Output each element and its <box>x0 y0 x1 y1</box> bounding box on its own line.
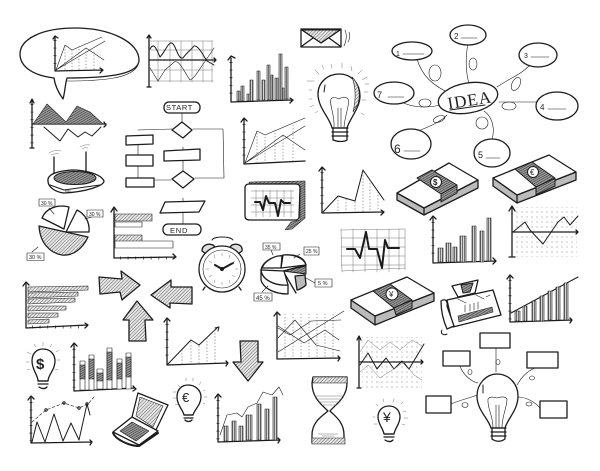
dollar bulb: $ <box>36 356 45 373</box>
node 1 <box>392 42 432 60</box>
yuan bulb <box>373 399 408 442</box>
arrow down <box>233 341 263 381</box>
flowchart start: START <box>166 103 193 112</box>
node 4 <box>536 92 578 120</box>
node 4: 4 <box>540 103 545 112</box>
dollar money stack: $ <box>433 178 438 187</box>
euro money stack <box>493 155 576 203</box>
wave line chart on grid <box>147 35 216 87</box>
pie label top: 30 % <box>41 201 53 207</box>
bar line chart bottom <box>215 387 283 443</box>
alarm clock <box>199 237 245 292</box>
pie label right: 30 % <box>89 212 101 218</box>
rising line chart <box>164 318 228 366</box>
yuan bulb: ¥ <box>382 409 391 425</box>
euro bulb: € <box>182 390 190 405</box>
node 7 <box>374 82 414 104</box>
yuan money stack <box>351 277 434 325</box>
dotted line chart <box>509 206 578 257</box>
arrow up <box>123 301 153 341</box>
pulse on grid <box>341 229 405 272</box>
hourglass <box>312 377 347 444</box>
label box top <box>480 333 510 348</box>
euro money stack: € <box>530 168 535 177</box>
dollar bulb <box>26 342 60 388</box>
laptop <box>113 393 168 446</box>
node 7: 7 <box>377 90 382 100</box>
horizontal bars left <box>23 282 88 328</box>
3d pie chart <box>254 243 332 302</box>
3d pie label 25: 25 % <box>306 249 318 255</box>
dotted double line chart <box>357 336 424 388</box>
label box upper right <box>527 352 558 368</box>
node 2: 2 <box>454 32 459 41</box>
wifi router: •••• <box>65 188 71 193</box>
pie chart <box>27 199 103 261</box>
label box lower left <box>426 396 451 413</box>
area chart <box>30 99 106 148</box>
flowchart <box>126 102 224 235</box>
arrow right <box>99 271 140 300</box>
fax machine <box>441 280 501 335</box>
bottom left chart <box>28 396 94 445</box>
central bulb <box>477 374 518 441</box>
3d pie label 35: 35 % <box>265 245 277 251</box>
node 5: 5 <box>478 150 483 160</box>
flowchart end: END <box>170 226 188 235</box>
central idea ellipse <box>436 78 500 118</box>
crossing lines chart <box>274 311 344 361</box>
small line chart <box>319 167 384 215</box>
line chart with dashed drops <box>241 118 305 164</box>
node 3 <box>519 43 557 67</box>
node 1: 1 <box>396 51 400 58</box>
bulb with label boxes <box>426 333 567 441</box>
stacked bar chart <box>71 343 136 391</box>
envelope <box>301 29 350 47</box>
central idea ellipse: IDEA <box>446 87 493 113</box>
idea light bulb <box>307 63 369 142</box>
label box upper left <box>443 351 470 366</box>
arrow left <box>151 280 192 308</box>
bar chart top <box>228 54 293 103</box>
euro bulb <box>173 378 207 422</box>
rising area bar chart <box>507 275 578 323</box>
3d pie label 5: 5 % <box>318 281 328 287</box>
pie label bottom: 30 % <box>29 255 42 261</box>
node 5 <box>474 139 510 167</box>
node 3: 3 <box>524 53 528 60</box>
horizontal bars small <box>111 207 176 259</box>
node 6 <box>391 129 431 159</box>
speech monitor with pulse <box>245 181 305 230</box>
yuan money stack: ¥ <box>388 290 394 299</box>
wifi router <box>48 145 104 193</box>
speech bubble with line chart <box>20 28 139 99</box>
label box lower right <box>540 401 567 418</box>
bar chart middle <box>430 216 496 264</box>
node 2 <box>450 25 486 45</box>
node 6: 6 <box>394 142 401 156</box>
mind map: idea <box>374 25 578 167</box>
dollar money stack <box>397 163 478 215</box>
3d pie label 45: 45 % <box>256 296 270 302</box>
